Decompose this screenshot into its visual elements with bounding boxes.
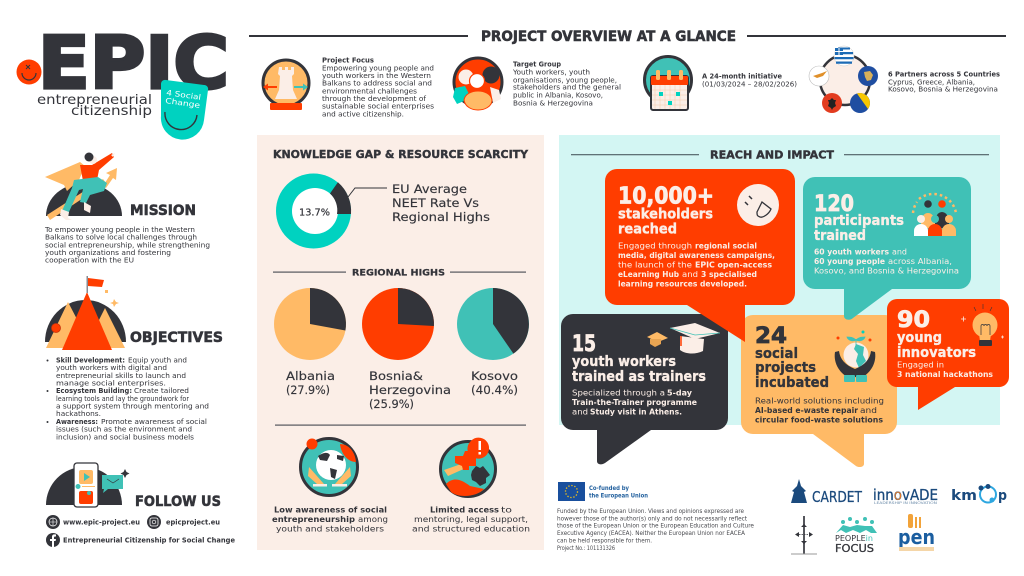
partner logo: pen	[898, 514, 935, 551]
speech bubble: 10,000+ stakeholders reached: EPIC open-access	[695, 260, 773, 270]
overview item: target group: organisations, young people,	[513, 76, 617, 84]
speech bubble: 10,000+ stakeholders reached: the launch of the	[618, 260, 692, 270]
speech bubble: 24 social projects incubated: social	[755, 346, 798, 362]
speech bubble: 15 youth workers trained as trainers: Specialized through a	[572, 388, 665, 398]
logo: EPIC entrepreneurial citizenship: citizenship	[71, 103, 152, 119]
list: objectives: Skill Development:	[56, 356, 125, 364]
social links: epicproject.eu	[166, 518, 220, 526]
speech bubble: 120 participants trained: 120	[814, 192, 854, 217]
speech bubble: 90 young innovators: 3 national hackathons	[897, 370, 994, 379]
pie chart: Kosovo 40.4%	[457, 288, 529, 397]
speech bubble: 120 participants trained: 60 youth workers	[814, 248, 890, 256]
pie chart: Albania 27.9%	[274, 288, 346, 397]
list: objectives: Create tailored	[134, 387, 189, 395]
speech bubble: 15 youth workers trained as trainers: Study visit in Athens.	[590, 408, 682, 416]
overview item: partners: 6 Partners across 5 Countries	[888, 70, 1000, 78]
icon: smile face	[737, 184, 779, 226]
speech bubble: 10,000+ stakeholders reached: 10,000+	[618, 184, 714, 210]
panel: knowledge gap and resource scarcity	[257, 135, 544, 550]
text: funding disclaimer	[557, 507, 754, 552]
list: objectives: Awareness:	[56, 418, 98, 426]
EU co-funded logo: Co-funded by	[589, 484, 630, 492]
partner logo: innovade: LEADERSHIP IN INNOVATION	[874, 501, 938, 505]
donut chart: EU average NEET 13.7%	[276, 174, 387, 248]
speech bubble: 24 social projects incubated: Real-world solutions including	[755, 396, 884, 406]
partner logo: people in focus: PEOPLE in	[835, 534, 873, 543]
callout: low awareness: Low awareness of social	[274, 506, 387, 514]
icon: globe in hands with sprout	[835, 330, 875, 382]
overview item: project focus: through the development of	[322, 95, 427, 103]
callout: low awareness: entrepreneurship	[272, 515, 355, 524]
text: funding disclaimer: those of the European Union or the European Education and Culture	[557, 522, 754, 530]
icon: partner flags ring	[809, 46, 878, 113]
icon: follow us phone	[46, 463, 130, 507]
text: mission statement: Balkans to solve local challenges through	[45, 234, 197, 242]
list: objectives: manage social enterprises.	[56, 380, 166, 388]
icon: objectives mountain with flag	[45, 276, 126, 350]
speech bubble: 24 social projects incubated: AI-based e-waste repair	[755, 406, 858, 415]
pie chart: Albania 27.9%: Albania	[286, 369, 335, 383]
speech bubble: 15 youth workers trained as trainers: and	[572, 408, 588, 416]
speech bubble: 90 young innovators: 90	[897, 308, 930, 333]
overview item: project focus: Project Focus	[322, 56, 374, 64]
text: funding disclaimer: Executive Agency (EACEA). Neither the European Union nor EACEA	[557, 529, 746, 537]
speech bubble: 24 social projects incubated	[741, 315, 897, 467]
speech bubble: 24 social projects incubated: 24	[755, 324, 787, 349]
pie chart: Kosovo 40.4%: Kosovo	[471, 369, 518, 383]
donut chart: EU average NEET 13.7%: 13.7%	[299, 208, 330, 218]
list: objectives: hackathons.	[56, 410, 101, 418]
overview item: project focus	[263, 56, 434, 118]
speech bubble: 10,000+ stakeholders reached: and	[682, 270, 698, 279]
heading: mission: MISSION	[130, 203, 196, 219]
speech bubble: 90 young innovators: young	[897, 330, 942, 346]
overview item: project focus: Balkans to address social and	[322, 80, 432, 88]
speech bubble: 10,000+ stakeholders reached: reached	[618, 222, 677, 238]
speech bubble: 90 young innovators: Engaged in	[897, 360, 944, 370]
speech bubble: 24 social projects incubated: projects	[755, 360, 816, 376]
logo: EPIC entrepreneurial citizenship: 4 Social	[166, 88, 202, 102]
overview item: target group: Target Group	[513, 60, 561, 68]
callout: limited access: and structured education	[412, 524, 530, 534]
speech bubble: 10,000+ stakeholders reached: 3 specialised	[701, 270, 757, 279]
overview item: project focus: environmental challenges	[322, 88, 417, 96]
text: mission statement: social entrepreneurship, while strengthening	[45, 241, 210, 249]
heading: regional highs: REGIONAL HIGHS	[352, 268, 445, 278]
pie chart: Bosnia and Herzegovina 25.9%: (25.9%)	[369, 397, 414, 411]
partner logo: CARDET: CARDET	[812, 488, 863, 506]
speech bubble: 120 participants trained: trained	[814, 228, 866, 244]
speech bubble: 120 participants trained: 60 young people	[814, 257, 885, 266]
icon: globe in hands	[300, 438, 358, 496]
overview item: target group: public in Albania, Kosovo,	[513, 92, 603, 100]
partner logo: pen: pen	[898, 525, 935, 549]
heading: reach and impact: REACH AND IMPACT	[710, 148, 835, 162]
partner logo: tower	[791, 516, 817, 554]
list: objectives: entrepreneurial skills to launch and	[56, 372, 186, 380]
label: EU average NEET rate: Regional Highs	[392, 210, 490, 224]
list: objectives: Equip youth and	[128, 356, 187, 364]
overview item: target group: Youth workers, youth	[512, 68, 590, 76]
social links	[46, 515, 235, 547]
speech bubble: 10,000+ stakeholders reached: media, digital awareness campaigns,	[618, 251, 775, 260]
speech bubble: 120 participants trained: and	[892, 248, 907, 256]
overview item: project focus: and active citizenship.	[322, 110, 404, 118]
text: mission statement: To empower young people in the Western	[44, 226, 195, 234]
pie chart: Albania 27.9%: (27.9%)	[286, 383, 330, 397]
speech bubble: 15 youth workers trained as trainers	[561, 314, 728, 464]
speech bubble: 10,000+ stakeholders reached: learning resources developed.	[618, 280, 747, 288]
text: mission statement: cooperation with the EU	[45, 257, 134, 265]
speech bubble: 120 participants trained: Kosovo, and Bosnia & Herzegovina	[814, 266, 959, 276]
overview item: duration: (01/03/2024 – 28/02/2026)	[702, 80, 797, 88]
pie chart: Kosovo 40.4%: (40.4%)	[471, 383, 518, 397]
logo: EPIC entrepreneurial citizenship: entrepreneurial	[37, 92, 152, 108]
speech bubble: 24 social projects incubated: incubated	[755, 375, 829, 391]
pie chart: Bosnia and Herzegovina 25.9%: Herzegovina	[369, 383, 451, 397]
list: objectives: Promote awareness of social	[101, 418, 207, 426]
icon: graduation caps	[647, 323, 720, 354]
text: mission statement: youth organizations and fostering	[45, 249, 171, 257]
icon: group of people	[913, 194, 956, 236]
speech bubble: 15 youth workers trained as trainers: 5-day	[667, 388, 692, 398]
icon: chess rook with arrows	[263, 60, 309, 110]
partner logo: innovade: innovADE	[873, 486, 938, 504]
overview item: partners: Kosovo, Bosnia & Herzegovina	[888, 86, 998, 94]
callout: low awareness: among	[358, 515, 388, 524]
label: EU average NEET rate: NEET Rate Vs	[392, 196, 479, 210]
partner logo: people in focus: FOCUS	[835, 543, 874, 555]
speech bubble: 15 youth workers trained as trainers: Train-the-Trainer programme	[572, 398, 697, 407]
icon: group of people	[453, 58, 502, 110]
callout: limited access: Limited access	[430, 506, 499, 514]
speech bubble: 10,000+ stakeholders reached: stakeholders	[618, 206, 713, 222]
label: EU average NEET rate	[392, 182, 490, 224]
list: objectives	[46, 356, 209, 441]
overview item: project focus: Empowering young people and	[322, 64, 434, 72]
text: funding disclaimer: can be held responsible for them.	[557, 536, 652, 544]
icon: puzzle pieces with alert	[440, 438, 496, 496]
pie chart: Bosnia and Herzegovina 25.9%: Bosnia&	[369, 369, 423, 383]
EU co-funded logo: the European Union	[589, 492, 648, 500]
list: objectives: learning tools and lay the groundwork for	[56, 395, 189, 403]
text: mission statement	[44, 226, 210, 265]
logo: EPIC entrepreneurial citizenship	[16, 21, 229, 140]
text: funding disclaimer: however those of the author(s) only and do not necessarily reflect	[557, 514, 747, 522]
panel: reach and impact background	[559, 135, 1000, 425]
overview item: partners: Cyprus, Greece, Albania,	[888, 78, 975, 86]
overview item: project focus: sustainable social enterprises	[322, 102, 434, 110]
logo: EPIC entrepreneurial citizenship: Change	[165, 96, 201, 110]
icon: calendar	[644, 56, 692, 110]
overview item: target group: stakeholders and the general	[513, 84, 621, 92]
logo: EPIC entrepreneurial citizenship: EPIC	[38, 21, 229, 105]
list: objectives: Ecosystem Building:	[56, 387, 132, 395]
partner logo: CARDET	[791, 479, 863, 506]
callout: low awareness: youth and stakeholders	[276, 524, 384, 534]
icon: light bulb	[961, 304, 1004, 346]
heading: knowledge gap: KNOWLEDGE GAP & RESOURCE SCARCITY	[273, 148, 529, 161]
heading: objectives: OBJECTIVES	[130, 330, 223, 346]
speech bubble: 120 participants trained	[803, 177, 971, 320]
list: objectives: youth workers with digital and	[56, 364, 167, 372]
speech bubble: 120 participants trained: across Albania,	[888, 257, 952, 266]
pie chart: Bosnia and Herzegovina 25.9%	[362, 288, 451, 411]
speech bubble: 10,000+ stakeholders reached: Engaged through	[618, 242, 692, 250]
speech bubble: 24 social projects incubated: and	[860, 406, 877, 415]
overview item: partners	[809, 46, 1000, 113]
callout: limited access: to	[501, 506, 512, 514]
list: objectives: inclusion) and social business models	[56, 433, 194, 441]
text: funding disclaimer: Funded by the European Union. Views and opinions expressed are	[557, 507, 744, 515]
partner logo: kmop: p	[998, 488, 1007, 504]
list: objectives: a support system through mentoring and	[56, 402, 209, 410]
speech bubble: 90 young innovators	[887, 299, 1009, 410]
speech bubble: 15 youth workers trained as trainers: trained as trainers	[572, 369, 706, 385]
speech bubble: 15 youth workers trained as trainers: youth workers	[572, 354, 676, 370]
callout: limited access	[412, 438, 530, 534]
speech bubble: 120 participants trained: participants	[814, 213, 904, 229]
overview item: target group	[453, 58, 621, 110]
speech bubble: 15 youth workers trained as trainers: 15	[572, 332, 596, 357]
social links: www.epic-project.eu	[63, 518, 140, 526]
overview item: project focus: youth workers in the Western	[322, 72, 431, 80]
label: EU average NEET rate: EU Average	[392, 182, 467, 196]
overview item: duration: A 24-month initiative	[702, 72, 782, 80]
heading: follow us: FOLLOW US	[135, 494, 221, 510]
partner logo: kmop: km	[951, 488, 977, 504]
speech bubble: 10,000+ stakeholders reached	[605, 169, 795, 342]
overview item: target group: Bosnia & Herzegovina	[513, 100, 593, 108]
speech bubble: 10,000+ stakeholders reached: regional social	[695, 242, 757, 250]
speech bubble: 90 young innovators: innovators	[897, 345, 976, 361]
callout: limited access: mentoring, legal support,	[414, 515, 528, 524]
text: funding disclaimer: Project No.: 101131326	[557, 544, 615, 552]
list: objectives: issues (such as the environment and	[56, 426, 192, 434]
icon: mission superhero	[45, 152, 122, 220]
social links: Entrepreneurial Citizenship for Social Change	[63, 536, 235, 544]
callout: low awareness	[272, 438, 388, 534]
speech bubble: 24 social projects incubated: circular food-waste solutions	[755, 416, 884, 424]
overview item: duration	[644, 56, 797, 110]
partner logo: people in focus	[835, 517, 877, 555]
speech bubble: 10,000+ stakeholders reached: eLearning Hub	[618, 270, 680, 279]
EU co-funded logo	[558, 482, 648, 501]
title: project overview at a glance: PROJECT OVERVIEW AT A GLANCE	[481, 29, 736, 45]
partner logo: kmop	[951, 484, 1007, 504]
